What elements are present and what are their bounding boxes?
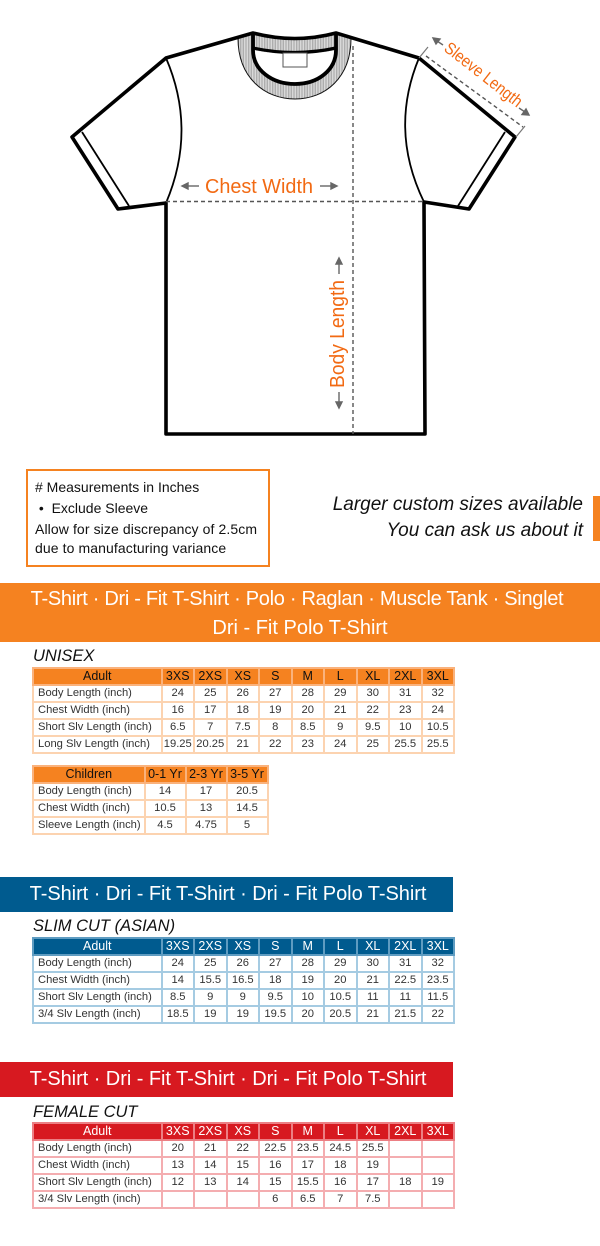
table: slim cut: 26 bbox=[237, 957, 249, 969]
table: female cut: Short Slv Length (inch) bbox=[38, 1176, 152, 1188]
table: female cut: 3/4 Slv Length (inch) bbox=[38, 1193, 141, 1205]
table: slim cut: 18 bbox=[269, 974, 281, 986]
table: slim cut: 10 bbox=[302, 991, 314, 1003]
banner: unisex products: Dri - Fit Polo T-Shirt bbox=[212, 617, 388, 639]
table: slim cut: 11.5 bbox=[427, 991, 448, 1003]
table: unisex adult: 22 bbox=[269, 738, 281, 750]
table: female cut: 15 bbox=[237, 1159, 249, 1171]
note lines: due to manufacturing variance bbox=[35, 540, 226, 556]
table: female cut: 24.5 bbox=[329, 1142, 351, 1154]
note lines: # Measurements in Inches bbox=[35, 479, 199, 495]
table: slim cut: 19 bbox=[204, 1008, 216, 1020]
table: female cut: 3XL bbox=[427, 1124, 449, 1138]
table: slim cut: 20.5 bbox=[329, 1008, 351, 1020]
table: female cut bbox=[32, 1122, 455, 1209]
table: unisex adult: 7.5 bbox=[235, 721, 251, 733]
table: unisex children: 14 bbox=[159, 785, 171, 797]
table: slim cut: 9.5 bbox=[267, 991, 283, 1003]
table: unisex children: Body Length (inch) bbox=[38, 785, 132, 797]
table: female cut: 22.5 bbox=[264, 1142, 286, 1154]
table: slim cut: 31 bbox=[399, 957, 411, 969]
custom sizes note: You can ask us about it bbox=[387, 520, 583, 541]
table: slim cut: Chest Width (inch) bbox=[38, 974, 130, 986]
table: unisex adult: L bbox=[337, 669, 344, 683]
table: slim cut: 20 bbox=[302, 1008, 314, 1020]
table: unisex adult: 30 bbox=[367, 687, 379, 699]
note lines bbox=[35, 479, 257, 556]
banner: slim cut products bbox=[0, 877, 453, 912]
label: chest width: Chest Width bbox=[205, 176, 313, 198]
table: female cut: XL bbox=[365, 1124, 380, 1138]
table: unisex adult: 16 bbox=[172, 704, 184, 716]
table: female cut: 16 bbox=[269, 1159, 281, 1171]
table: slim cut: 23.5 bbox=[427, 974, 449, 986]
table: female cut: 21 bbox=[204, 1142, 216, 1154]
table: unisex children bbox=[32, 765, 269, 835]
table: slim cut: 22 bbox=[432, 1008, 444, 1020]
table: unisex adult: 3XL bbox=[427, 669, 449, 683]
table: slim cut: 25 bbox=[204, 957, 216, 969]
table: slim cut: 18.5 bbox=[167, 1008, 189, 1020]
table: unisex adult: 32 bbox=[432, 687, 444, 699]
banner: unisex products bbox=[0, 583, 600, 642]
table: slim cut: 29 bbox=[334, 957, 346, 969]
table: unisex adult: 20.25 bbox=[196, 738, 224, 750]
table: female cut: 2XS bbox=[198, 1124, 222, 1138]
table: slim cut: Body Length (inch) bbox=[38, 957, 132, 969]
table: unisex adult: 3XS bbox=[166, 669, 190, 683]
table: female cut: 14 bbox=[237, 1176, 249, 1188]
custom sizes note: Larger custom sizes available bbox=[333, 494, 583, 515]
table: slim cut: 21.5 bbox=[394, 1008, 416, 1020]
table: unisex adult: 2XL bbox=[394, 669, 416, 683]
table: unisex children: 4.5 bbox=[157, 819, 173, 831]
table: unisex adult: XS bbox=[234, 669, 251, 683]
table: slim cut: 2XL bbox=[394, 939, 416, 953]
collar ribbing bbox=[238, 33, 351, 99]
table: unisex adult: 23 bbox=[302, 738, 314, 750]
table: unisex adult: 9.5 bbox=[365, 721, 381, 733]
table: slim cut: 11 bbox=[399, 991, 411, 1003]
table: slim cut: 30 bbox=[367, 957, 379, 969]
table: female cut: 13 bbox=[172, 1159, 184, 1171]
table: female cut: XS bbox=[234, 1124, 251, 1138]
table: slim cut: 19 bbox=[237, 1008, 249, 1020]
table: unisex children: 20.5 bbox=[236, 785, 258, 797]
label: body length: Body Length bbox=[327, 280, 349, 388]
table: female cut: 6 bbox=[272, 1193, 278, 1205]
table: unisex adult: 20 bbox=[302, 704, 314, 716]
table: female cut: M bbox=[303, 1124, 313, 1138]
table: slim cut: 28 bbox=[302, 957, 314, 969]
table: slim cut: Short Slv Length (inch) bbox=[38, 991, 152, 1003]
table: unisex children: 4.75 bbox=[195, 819, 217, 831]
table: unisex adult: 27 bbox=[269, 687, 281, 699]
table: female cut: 3XS bbox=[166, 1124, 190, 1138]
table: unisex children: 2-3 Yr bbox=[189, 767, 223, 781]
banner: slim cut products: T-Shirt · Dri - Fit T-Shirt · Dri - Fit Polo T-Shirt bbox=[30, 883, 426, 905]
table: slim cut: 9 bbox=[207, 991, 213, 1003]
table: slim cut: 22.5 bbox=[394, 974, 416, 986]
table: unisex adult: 25 bbox=[367, 738, 379, 750]
table: slim cut: 8.5 bbox=[170, 991, 186, 1003]
table: female cut: 22 bbox=[237, 1142, 249, 1154]
table: slim cut: M bbox=[303, 939, 313, 953]
table: female cut: 25.5 bbox=[362, 1142, 384, 1154]
table: unisex adult: 21 bbox=[237, 738, 249, 750]
measure lines bbox=[166, 46, 523, 434]
table: unisex adult: 26 bbox=[237, 687, 249, 699]
table: female cut: 18 bbox=[399, 1176, 411, 1188]
table: slim cut: 21 bbox=[367, 974, 379, 986]
orange tab bbox=[593, 496, 600, 541]
table: female cut: 19 bbox=[367, 1159, 379, 1171]
table: unisex adult: Long Slv Length (inch) bbox=[38, 738, 150, 750]
table: unisex adult: 25.5 bbox=[394, 738, 416, 750]
table: unisex adult: 19.25 bbox=[164, 738, 192, 750]
table: female cut: 16 bbox=[334, 1176, 346, 1188]
table: unisex children: 3-5 Yr bbox=[230, 767, 264, 781]
table: unisex children: Chest Width (inch) bbox=[38, 802, 130, 814]
table: female cut: 15 bbox=[269, 1176, 281, 1188]
note box bbox=[26, 469, 270, 567]
table: female cut: 7 bbox=[337, 1193, 343, 1205]
table: slim cut: Adult bbox=[83, 939, 112, 953]
table: unisex adult: 10 bbox=[399, 721, 411, 733]
table: slim cut: 21 bbox=[367, 1008, 379, 1020]
table: unisex adult: 10.5 bbox=[427, 721, 449, 733]
table: female cut: 14 bbox=[204, 1159, 216, 1171]
table: unisex adult: 17 bbox=[204, 704, 216, 716]
table: slim cut: 16.5 bbox=[232, 974, 254, 986]
table: unisex adult: 18 bbox=[237, 704, 249, 716]
neck label bbox=[283, 53, 307, 67]
table: female cut: L bbox=[337, 1124, 344, 1138]
table: female cut: 18 bbox=[334, 1159, 346, 1171]
table: slim cut: L bbox=[337, 939, 344, 953]
table: slim cut bbox=[32, 937, 455, 1024]
table: unisex children: 13 bbox=[200, 802, 212, 814]
shirt outline bbox=[72, 33, 515, 434]
table: slim cut: 15.5 bbox=[199, 974, 221, 986]
table: slim cut: S bbox=[271, 939, 279, 953]
sleeve ticks bbox=[419, 47, 525, 137]
collar inner band bbox=[253, 33, 336, 84]
table: female cut: S bbox=[271, 1124, 279, 1138]
table: unisex children: 14.5 bbox=[236, 802, 258, 814]
table: unisex children: 0-1 Yr bbox=[148, 767, 182, 781]
table: unisex adult: S bbox=[271, 669, 279, 683]
table: unisex adult: M bbox=[303, 669, 313, 683]
table: female cut: 20 bbox=[172, 1142, 184, 1154]
table: unisex adult: 8 bbox=[272, 721, 278, 733]
table: unisex adult: Adult bbox=[83, 669, 112, 683]
table: unisex adult bbox=[32, 667, 455, 754]
table: unisex adult: 24 bbox=[334, 738, 346, 750]
note lines: • Exclude Sleeve bbox=[39, 500, 148, 516]
table: slim cut: 24 bbox=[172, 957, 184, 969]
table: unisex adult: Short Slv Length (inch) bbox=[38, 721, 152, 733]
table: female cut: 15.5 bbox=[297, 1176, 319, 1188]
table: slim cut: XS bbox=[234, 939, 251, 953]
label: sleeve length: Sleeve Length bbox=[441, 38, 526, 111]
table: female cut: Adult bbox=[83, 1124, 112, 1138]
table: unisex adult: 2XS bbox=[198, 669, 222, 683]
table: unisex adult: 25 bbox=[204, 687, 216, 699]
table: unisex adult: XL bbox=[365, 669, 380, 683]
table: female cut: 13 bbox=[204, 1176, 216, 1188]
table: slim cut: 2XS bbox=[198, 939, 222, 953]
table: unisex children: 10.5 bbox=[154, 802, 176, 814]
table: slim cut: XL bbox=[365, 939, 380, 953]
table: slim cut: 14 bbox=[172, 974, 184, 986]
banner: female cut products: T-Shirt · Dri - Fit T-Shirt · Dri - Fit Polo T-Shirt bbox=[30, 1068, 426, 1090]
table: unisex children: 17 bbox=[200, 785, 212, 797]
table: female cut: 17 bbox=[302, 1159, 314, 1171]
table: unisex adult: 28 bbox=[302, 687, 314, 699]
table: unisex children: 5 bbox=[244, 819, 250, 831]
table: slim cut: 32 bbox=[432, 957, 444, 969]
table: female cut: 12 bbox=[172, 1176, 184, 1188]
table: unisex adult: Chest Width (inch) bbox=[38, 704, 130, 716]
table: slim cut: 19.5 bbox=[264, 1008, 286, 1020]
table: unisex adult: 25.5 bbox=[427, 738, 449, 750]
table: female cut: 23.5 bbox=[297, 1142, 319, 1154]
table: slim cut: 3/4 Slv Length (inch) bbox=[38, 1008, 141, 1020]
table: slim cut: 19 bbox=[302, 974, 314, 986]
table: slim cut: 3XL bbox=[427, 939, 449, 953]
table: unisex adult: 7 bbox=[207, 721, 213, 733]
table: female cut: 2XL bbox=[394, 1124, 416, 1138]
table: unisex adult: 31 bbox=[399, 687, 411, 699]
table: female cut: Chest Width (inch) bbox=[38, 1159, 130, 1171]
table: unisex adult: 21 bbox=[334, 704, 346, 716]
diagram: t-shirt with measurements bbox=[70, 31, 530, 436]
custom sizes note bbox=[333, 494, 584, 541]
table: unisex adult: 24 bbox=[432, 704, 444, 716]
table: unisex adult: 23 bbox=[399, 704, 411, 716]
table: slim cut: 9 bbox=[240, 991, 246, 1003]
note lines: Allow for size discrepancy of 2.5cm bbox=[35, 521, 257, 537]
table: unisex adult: 24 bbox=[172, 687, 184, 699]
banner: female cut products bbox=[0, 1062, 453, 1097]
table: female cut: 7.5 bbox=[365, 1193, 381, 1205]
table: unisex adult: Body Length (inch) bbox=[38, 687, 132, 699]
table: slim cut: 27 bbox=[269, 957, 281, 969]
table: female cut: 6.5 bbox=[300, 1193, 316, 1205]
table: unisex children: Sleeve Length (inch) bbox=[38, 819, 141, 831]
table: female cut: 17 bbox=[367, 1176, 379, 1188]
heading: slim cut: SLIM CUT (ASIAN) bbox=[33, 917, 175, 935]
table: slim cut: 10.5 bbox=[329, 991, 351, 1003]
table: unisex adult: 9 bbox=[337, 721, 343, 733]
table: slim cut: 3XS bbox=[166, 939, 190, 953]
heading: female cut: FEMALE CUT bbox=[33, 1103, 138, 1121]
table: female cut: Body Length (inch) bbox=[38, 1142, 132, 1154]
table: unisex adult: 8.5 bbox=[300, 721, 316, 733]
armhole and sleeve hem seams bbox=[82, 58, 505, 206]
table: female cut: 19 bbox=[432, 1176, 444, 1188]
table: slim cut: 11 bbox=[367, 991, 379, 1003]
table: unisex adult: 22 bbox=[367, 704, 379, 716]
table: unisex children: Children bbox=[65, 767, 112, 781]
table: unisex adult: 19 bbox=[269, 704, 281, 716]
table: unisex adult: 29 bbox=[334, 687, 346, 699]
table: unisex adult: 6.5 bbox=[170, 721, 186, 733]
heading: unisex: UNISEX bbox=[33, 647, 94, 665]
table: slim cut: 20 bbox=[334, 974, 346, 986]
banner: unisex products: T-Shirt · Dri - Fit T-Shirt · Polo · Raglan · Muscle Tank · Singlet bbox=[31, 588, 563, 610]
arrows bbox=[182, 38, 529, 408]
